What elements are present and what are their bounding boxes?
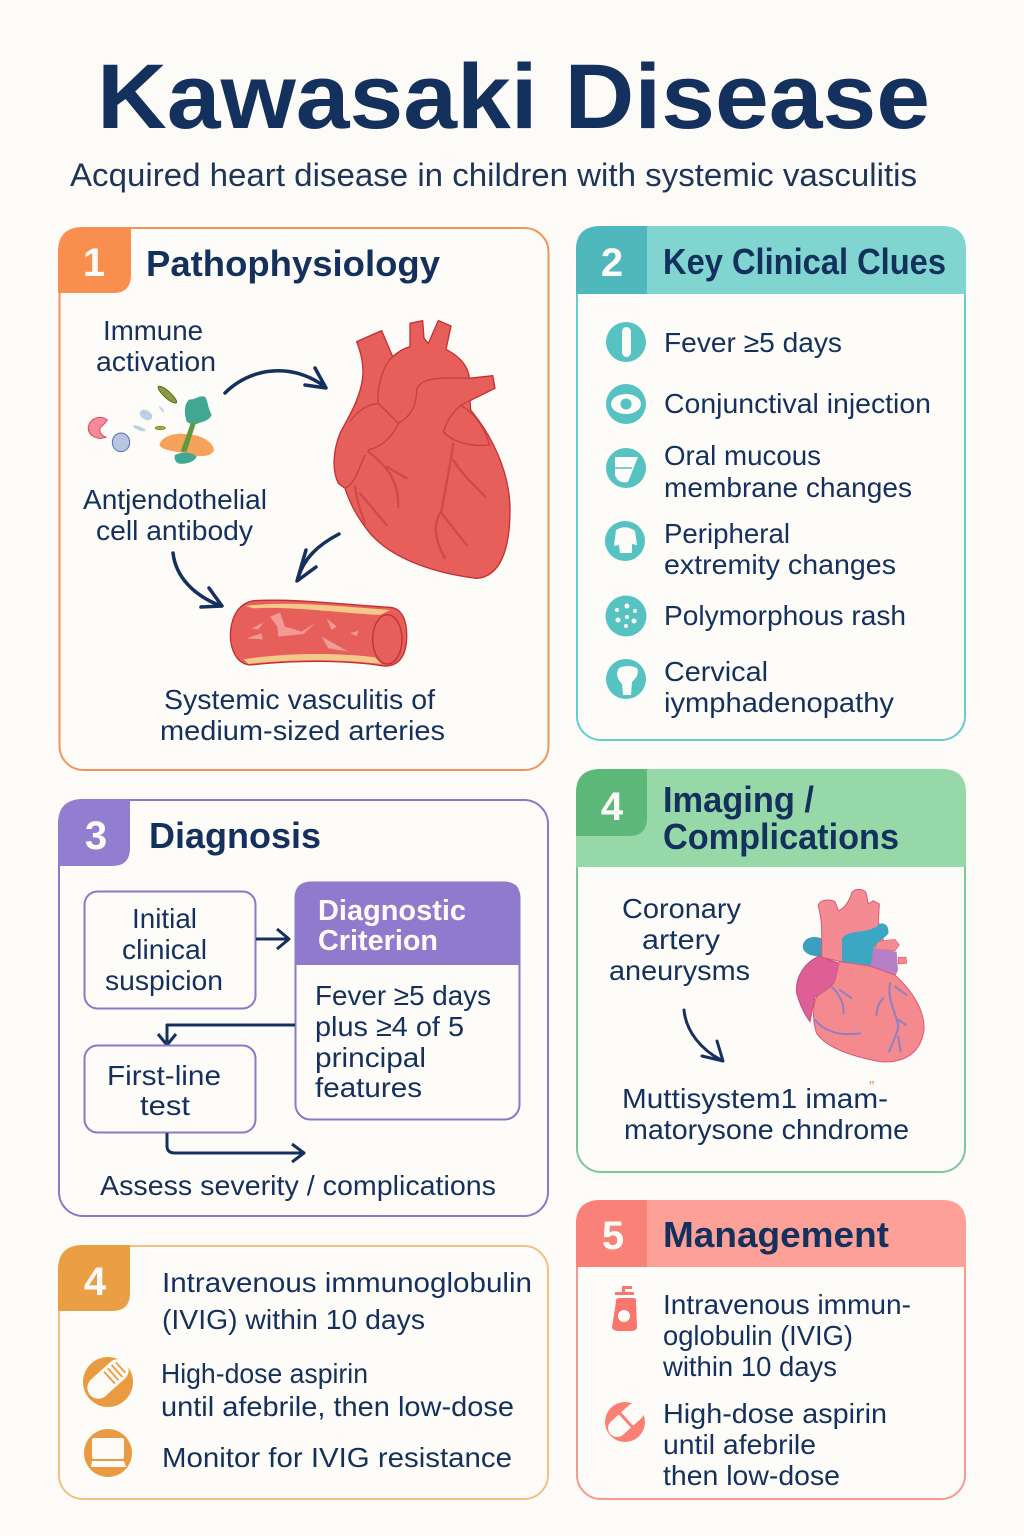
text: antiendothelial antibody: cell antibody: [96, 515, 253, 546]
box: diagnostic criterion: principal: [315, 1042, 426, 1073]
badge: 4: 4: [84, 1260, 107, 1304]
text: assess severity: Assess severity / complications: [100, 1170, 496, 1201]
heading: imaging complications: Imaging /: [663, 779, 814, 820]
text: aspirin: High-dose aspirin: [161, 1358, 368, 1389]
badge: 3: 3: [85, 814, 107, 858]
text: systemic vasculitis: [160, 684, 445, 746]
item: fever: Fever ≥5 days: [664, 327, 842, 358]
badge: 1: [58, 227, 131, 293]
illustration: coronary heart: [796, 889, 924, 1062]
badge: 2: [576, 226, 647, 294]
text: aspirin: [663, 1398, 887, 1491]
item: peripheral extremity: Peripheral: [664, 518, 790, 549]
item: polymorphous rash: [606, 596, 906, 636]
icon: IV bag: [612, 1286, 637, 1331]
item: oral mucous: [606, 440, 912, 503]
text: multisystem syndrome: [622, 1079, 909, 1145]
text: coronary artery aneurysms: [609, 893, 750, 986]
text: systemic vasculitis: Systemic vasculitis of: [164, 684, 435, 715]
arrow: aneurysms to MIS-C: [684, 1010, 723, 1061]
arrow: test to severity: [167, 1133, 304, 1162]
item: fever: [606, 322, 842, 362]
text: immune activation: [96, 315, 216, 377]
text: coronary artery aneurysms: artery: [642, 924, 720, 955]
panel: management right: [576, 1200, 966, 1499]
item: cervical lymphadenopathy: [606, 656, 894, 718]
item: cervical lymphadenopathy: iymphadenopathy: [664, 687, 894, 718]
arrow: criterion to first-line test: [158, 1025, 295, 1045]
item: oral mucous: Oral mucous: [664, 440, 821, 471]
panel: imaging complications: [576, 769, 966, 1172]
icon: monitor: [84, 1429, 132, 1477]
box: first-line test: First-line: [107, 1060, 221, 1091]
text: IVIG: Intravenous immunoglobulin: [162, 1267, 532, 1298]
text: aspirin: High-dose aspirin: [663, 1398, 887, 1429]
arrow: antibody to artery: [173, 553, 222, 607]
box: diagnostic criterion: Fever ≥5 days: [315, 980, 491, 1011]
text: multisystem syndrome: Muttisystem1 imam-: [622, 1083, 888, 1114]
text: IVIG: [162, 1267, 532, 1335]
panel: pathophysiology: [58, 227, 548, 770]
item: polymorphous rash: Polymorphous rash: [664, 600, 906, 631]
item: cervical lymphadenopathy: Cervical: [664, 656, 768, 687]
text: IVIG: within 10 days: [662, 1351, 837, 1382]
text: IVIG: Intravenous immun-: [663, 1289, 911, 1320]
box: diagnostic criterion: [295, 882, 520, 1120]
box: initial clinical suspicion: clinical: [122, 934, 207, 965]
item: peripheral extremity: extremity changes: [664, 549, 896, 580]
badge: 4: [576, 769, 647, 836]
item: conjunctival injection: [606, 384, 931, 424]
heading: key clinical clues: Key Clinical Clues: [663, 241, 946, 282]
badge: 5: 5: [602, 1214, 624, 1258]
arrow: suspicion to criterion: [256, 929, 289, 949]
heading: imaging complications: [663, 779, 899, 857]
badge: 2: 2: [601, 241, 623, 285]
text: coronary artery aneurysms: Coronary: [622, 893, 741, 924]
text: multisystem syndrome: ”: [869, 1079, 874, 1096]
text: aspirin: until afebrile, then low-dose: [161, 1391, 514, 1422]
heading: pathophysiology: Pathophysiology: [146, 243, 440, 284]
icon: aspirin pill: [83, 1355, 133, 1407]
text: immune activation: activation: [96, 346, 216, 377]
box: first-line test: test: [140, 1090, 190, 1121]
text: systemic vasculitis: medium-sized arteries: [160, 715, 445, 746]
badge: 3: [58, 799, 130, 866]
badge: 4: 4: [601, 785, 624, 829]
text: IVIG: [662, 1289, 911, 1382]
box: initial clinical suspicion: Initial: [132, 903, 197, 934]
panel: key clinical clues: [576, 226, 966, 740]
heading: management: Management: [663, 1214, 889, 1255]
text: aspirin: [161, 1358, 514, 1422]
header band: [576, 226, 966, 294]
text: coronary artery aneurysms: aneurysms: [609, 955, 750, 986]
box: diagnostic criterion: Criterion: [318, 925, 438, 957]
text: multisystem syndrome: matorysone chndrome: [624, 1114, 909, 1145]
title: Kawasaki Disease: [97, 46, 930, 148]
item: oral mucous: membrane changes: [664, 472, 912, 503]
text: aspirin: then low-dose: [663, 1460, 840, 1491]
panel: diagnosis: [58, 799, 548, 1216]
illustration: artery: [230, 600, 407, 666]
box: diagnostic criterion: Diagnostic: [318, 895, 466, 927]
icon: immune cells: [88, 384, 214, 464]
item: peripheral extremity: [605, 518, 896, 580]
badge: 5: [576, 1200, 647, 1267]
subtitle: Acquired heart disease in children with systemic vasculitis: [70, 157, 917, 193]
box: diagnostic criterion: features: [315, 1072, 422, 1103]
text: immune activation: Immune: [103, 315, 203, 346]
text: aspirin: until afebrile: [663, 1429, 816, 1460]
heading: diagnosis: Diagnosis: [149, 815, 321, 856]
illustration: heart: [334, 321, 510, 578]
badge: 1: 1: [83, 241, 105, 285]
text: IVIG: oglobulin (IVIG): [663, 1320, 853, 1351]
icon: aspirin capsule: [602, 1396, 650, 1444]
panel: management left: [58, 1245, 548, 1499]
item: conjunctival injection: Conjunctival injection: [664, 388, 931, 419]
box: initial clinical suspicion: suspicion: [105, 965, 223, 996]
heading: imaging complications: Complications: [663, 816, 899, 857]
header band: [576, 1200, 966, 1267]
text: antiendothelial antibody: Antjendothelial: [83, 484, 267, 515]
text: IVIG: (IVIG) within 10 days: [162, 1304, 425, 1335]
badge: 4: [58, 1245, 130, 1311]
text: monitor IVIG resistance: Monitor for IVIG resistance: [162, 1442, 512, 1473]
box: first-line test: [84, 1046, 256, 1132]
text: antiendothelial antibody: [83, 484, 267, 546]
box: initial clinical suspicion: [84, 892, 256, 1008]
header band: [576, 769, 966, 867]
box: diagnostic criterion: plus ≥4 of 5: [315, 1011, 464, 1042]
arrow: activation to heart: [225, 368, 326, 393]
arrow: heart to artery: [297, 534, 339, 581]
